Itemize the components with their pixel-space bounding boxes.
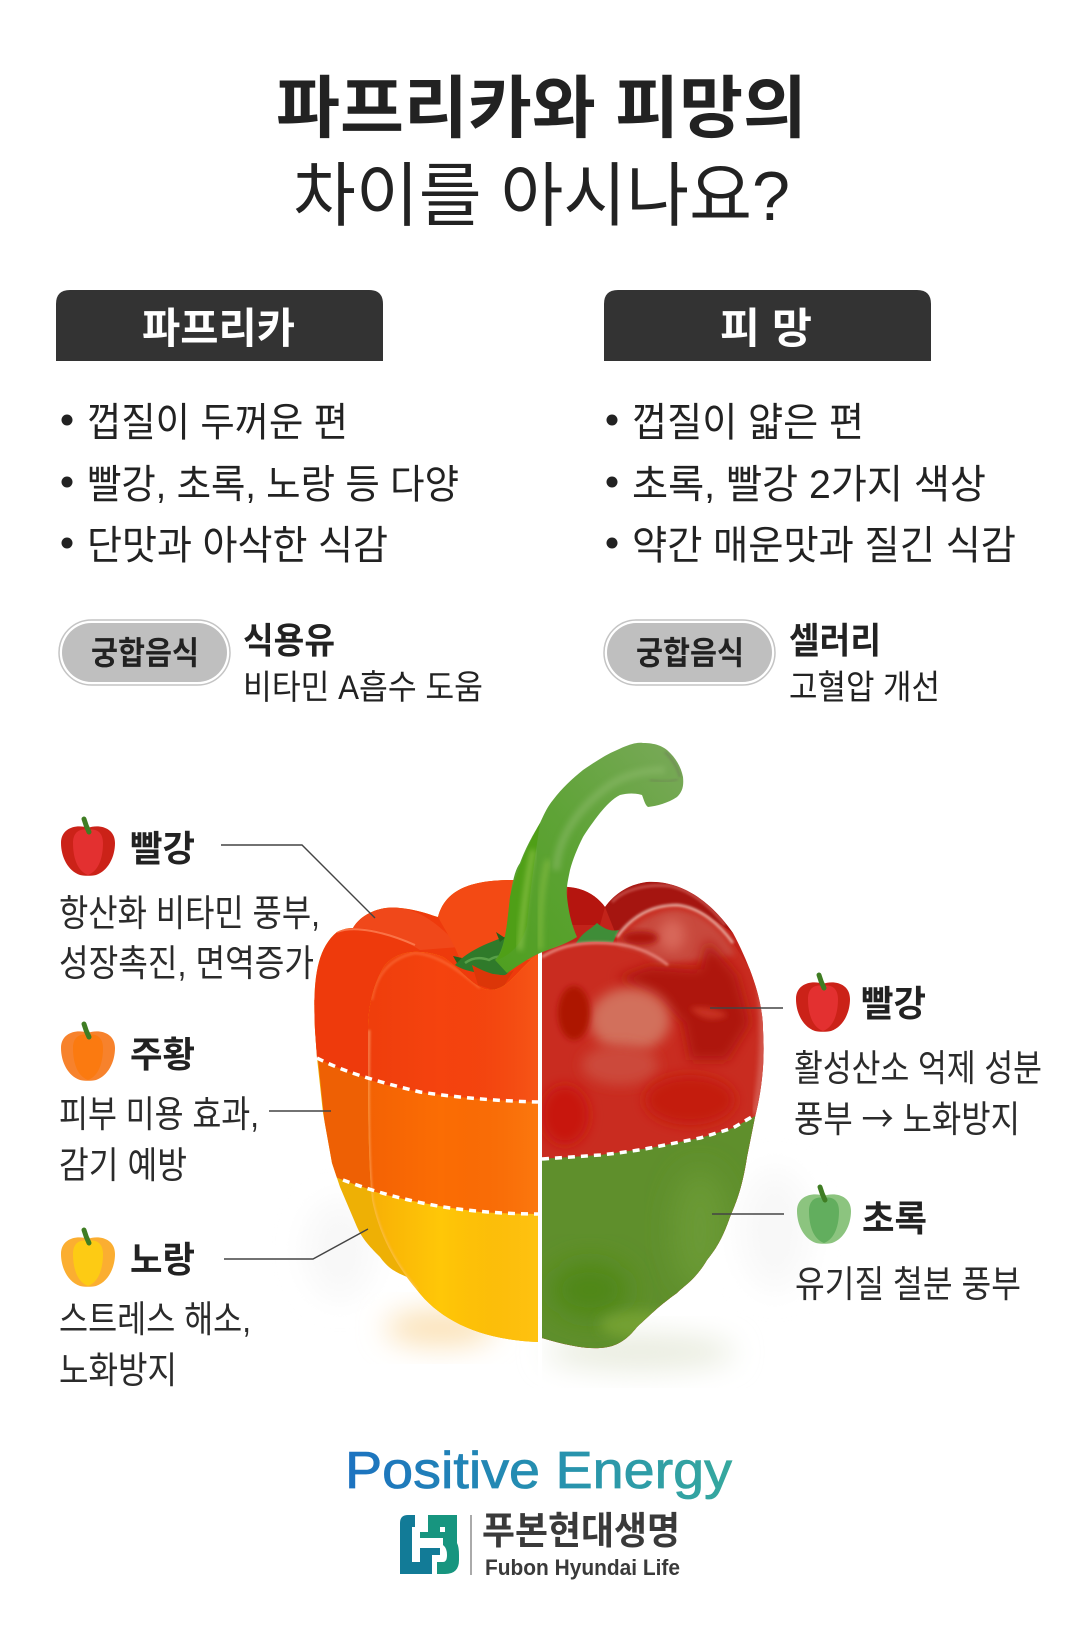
good pairing: paprika: 식용유	[243, 620, 335, 661]
label: yellow paprika: 노화방지	[59, 1350, 177, 1391]
logo: Fubon Hyundai Life: Fubon Hyundai Life	[485, 1555, 680, 1580]
pepper illustration	[300, 743, 810, 1410]
label: red paprika: 성장촉진, 면역증가	[59, 943, 314, 984]
slogan: Positive Energy	[345, 1442, 732, 1500]
good pairing: bell pepper: 궁합음식	[636, 635, 744, 671]
good pairing: paprika: 궁합음식	[91, 635, 199, 671]
label: red bell pepper: 활성산소 억제 성분	[794, 1048, 1042, 1089]
logo: Fubon Hyundai Life: 푸본현대생명	[482, 1511, 680, 1553]
upper lobes	[353, 907, 460, 950]
label: orange paprika	[59, 1024, 259, 1186]
icon: red pepper	[61, 819, 115, 876]
green band	[542, 1116, 756, 1348]
dashed band lines	[317, 1058, 755, 1214]
left half: back lobes	[314, 880, 538, 1342]
label: green bell pepper: 초록	[862, 1198, 927, 1239]
right half: front lobes with red and green bands	[540, 905, 780, 1360]
heading bar: paprika: 파프리카	[142, 305, 295, 352]
good pairing: paprika: 비타민 A흡수 도움	[243, 669, 483, 707]
label: red bell pepper	[794, 975, 1042, 1143]
label: green bell pepper	[795, 1187, 1021, 1305]
logo: Fubon Hyundai Life	[400, 1511, 680, 1580]
bullet list: bell pepper: 초록, 빨강 2가지 색상	[632, 463, 986, 507]
leader lines	[221, 845, 784, 1259]
label: red bell pepper: 풍부 → 노화방지	[794, 1089, 1020, 1143]
good pairing: paprika	[59, 620, 483, 707]
label: yellow paprika	[59, 1230, 251, 1391]
icon: green bell pepper	[797, 1187, 851, 1244]
left half: front lobe with colour bands	[368, 952, 538, 1342]
title: 파프리카와 피망의	[276, 71, 807, 147]
label: green bell pepper: 유기질 철분 풍부	[795, 1264, 1021, 1305]
pepper shadow	[305, 1170, 810, 1410]
icon: orange pepper	[61, 1024, 115, 1081]
red surface patches	[618, 910, 735, 965]
label: yellow paprika: 스트레스 해소,	[59, 1299, 251, 1340]
label: red paprika: 항산화 비타민 풍부,	[59, 893, 320, 934]
label: red paprika	[59, 819, 320, 984]
panel: bell pepper	[604, 290, 1016, 707]
heading bar: bell pepper	[604, 290, 931, 361]
label: red paprika: 빨강	[130, 828, 195, 869]
title: 차이를 아시나요?	[293, 157, 790, 235]
calyx	[453, 923, 619, 976]
bullet list: paprika: 단맛과 아삭한 식감	[87, 524, 388, 568]
good pairing: bell pepper	[604, 620, 940, 707]
label: orange paprika: 감기 예방	[59, 1145, 187, 1186]
good pairing: bell pepper: 고혈압 개선	[789, 669, 940, 707]
label: yellow paprika: 노랑	[130, 1239, 195, 1280]
icon: Fubon mark	[400, 1515, 459, 1574]
label: orange paprika: 주황	[130, 1034, 195, 1075]
bullet list: paprika: 빨강, 초록, 노랑 등 다양	[87, 463, 459, 507]
good pairing: bell pepper: 셀러리	[789, 620, 881, 661]
heading bar: paprika	[56, 290, 383, 361]
heading bar: bell pepper: 피 망	[720, 305, 812, 352]
title	[276, 71, 807, 235]
bullet list: bell pepper: 약간 매운맛과 질긴 식감	[632, 524, 1016, 568]
icon: yellow pepper	[61, 1230, 115, 1287]
stem	[495, 743, 683, 973]
bullet list: paprika: 껍질이 두꺼운 편	[87, 401, 348, 445]
bullet list: paprika	[62, 401, 459, 568]
label: orange paprika: 피부 미용 효과,	[59, 1094, 259, 1135]
label: red bell pepper: 빨강	[861, 983, 926, 1024]
bullet list: bell pepper	[606, 401, 1016, 568]
inner fold	[472, 965, 514, 992]
panel: paprika	[56, 290, 483, 707]
right half: back lobes	[542, 882, 764, 1348]
bullet list: bell pepper: 껍질이 얇은 편	[632, 401, 864, 445]
icon: red bell pepper	[796, 975, 850, 1032]
